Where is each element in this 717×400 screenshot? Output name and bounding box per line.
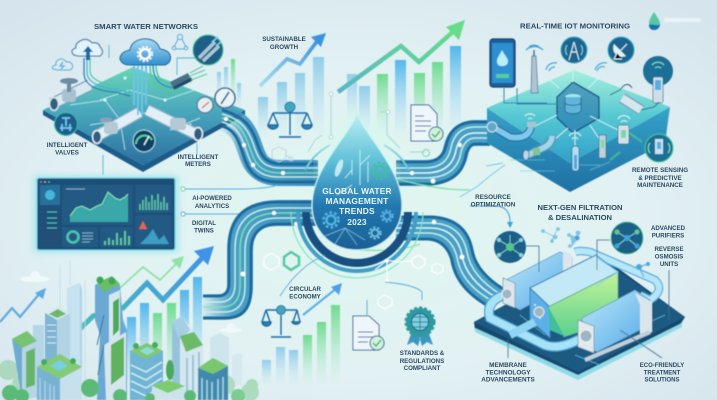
arrow head: small city growth xyxy=(35,288,46,299)
label: standards and regulations compliant: STANDARDS & xyxy=(400,350,445,357)
icon: scales bottom xyxy=(262,306,300,337)
heading: next-gen filtration and desalination: & DESALINATION xyxy=(548,213,612,222)
icon: gear left xyxy=(324,212,338,228)
icon: scales top xyxy=(268,102,312,137)
label: intelligent valves: VALVES xyxy=(55,150,79,156)
icon: cloud small left xyxy=(72,39,102,56)
building: right low xyxy=(198,358,228,400)
icon: white molecule hexagons xyxy=(264,253,443,309)
glow: dashboard xyxy=(33,175,179,253)
label: eco-friendly treatment solutions: TREATMENT xyxy=(644,370,681,376)
icon: lightning cloud outline xyxy=(52,59,73,70)
title: global water management trends 2023: GLOBAL WATER xyxy=(322,186,392,196)
tank: right cylinder xyxy=(578,290,652,360)
label: circular economy: CIRCULAR xyxy=(289,286,322,293)
building: central tower xyxy=(95,276,127,400)
building: green terrace left xyxy=(45,307,70,380)
arrow: city growth main xyxy=(72,256,204,337)
label: membrane technology advancements: TECHNOLOGY xyxy=(485,370,531,376)
tank: connecting pipe xyxy=(510,307,544,335)
icon: molecule small right xyxy=(636,262,650,277)
icon: phone xyxy=(490,39,515,87)
dashboard xyxy=(37,178,175,250)
pipe: iot elbow lower xyxy=(523,136,552,160)
icon: remote sensing circle xyxy=(645,134,673,162)
ring: lower arc around the droplet xyxy=(291,145,423,278)
label: reverse osmosis units: REVERSE xyxy=(654,246,684,253)
panel: top right bars xyxy=(135,185,172,213)
arrow: sustainable growth xyxy=(260,40,318,86)
lines: filtration callouts xyxy=(508,240,669,358)
icon: cloud centre xyxy=(120,39,170,65)
pipeline: lower left xyxy=(203,202,318,318)
tank: blue chamber xyxy=(530,255,618,338)
icon: floating molecules xyxy=(542,228,580,248)
icon: dashboard badge dot xyxy=(45,190,55,200)
label: circular economy: ECONOMY xyxy=(289,294,321,300)
label: standards and regulations compliant: REGULATIONS xyxy=(400,358,444,365)
label: sustainable growth: GROWTH xyxy=(270,44,299,51)
block: iot water xyxy=(487,70,670,192)
pipeline: upper right xyxy=(396,122,490,184)
arrow: small city growth xyxy=(0,293,40,322)
icon: wifi small left xyxy=(546,63,557,71)
icon: gauge centre xyxy=(133,130,155,152)
label: eco-friendly treatment solutions: ECO-FRIENDLY xyxy=(640,363,684,369)
icon: molecule grey upper xyxy=(272,147,293,162)
lines: centre circuit connectors xyxy=(308,92,430,156)
pipe: left main pipe with valve xyxy=(50,78,90,110)
cables: from clouds xyxy=(84,58,178,115)
label: advanced purifiers: ADVANCED xyxy=(651,225,686,232)
building: stripes centre xyxy=(130,342,163,400)
icon: molecule circle left xyxy=(494,231,526,263)
building: far left xyxy=(12,331,37,400)
label: remote sensing and predictive maintenance: & PREDICTIVE xyxy=(638,175,682,182)
icon: triangle nodes xyxy=(172,34,188,50)
icon: cylinder sensor xyxy=(610,84,659,110)
bar chart: lower centre xyxy=(262,305,340,385)
label: remote sensing and predictive maintenance: MAINTENANCE xyxy=(637,182,683,189)
title: global water management trends 2023: 2023 xyxy=(347,217,367,227)
label: advanced purifiers: PURIFIERS xyxy=(652,232,684,240)
label: eco-friendly treatment solutions: SOLUTIONS xyxy=(644,378,680,384)
building: mid left with pool xyxy=(37,354,82,400)
arrow: resource optimization xyxy=(470,206,510,222)
icon: server hexagon xyxy=(557,82,599,133)
pipe: lower right with meter xyxy=(147,110,202,140)
heading: smart water networks: SMART WATER NETWORKS xyxy=(94,22,198,31)
bar chart: small network bars xyxy=(217,59,241,109)
title: global water management trends 2023: MANAGEMENT xyxy=(326,196,389,206)
icon: molecule circle right xyxy=(611,222,643,254)
label: ai-powered analytics: ANALYTICS xyxy=(195,203,229,210)
heading: real-time iot monitoring: REAL-TIME IOT MONITORING xyxy=(520,22,630,30)
lines: lower curve connector xyxy=(280,255,422,315)
panel: leak alert xyxy=(135,215,172,247)
icon: wifi in water xyxy=(525,114,630,139)
panel: dashboard side menu xyxy=(40,206,60,247)
glow: around droplet xyxy=(321,118,393,202)
lines: label connectors xyxy=(103,45,275,216)
arrow head: upper centre growth xyxy=(446,20,465,40)
icon: gear right xyxy=(382,210,392,222)
platform: smart water networks xyxy=(43,67,245,172)
icon: wifi small right xyxy=(595,63,607,71)
label: ai-powered analytics: AI-POWERED xyxy=(192,195,232,202)
icon: upload arrow in cloud xyxy=(83,46,93,60)
label: intelligent meters: METERS xyxy=(185,161,211,168)
pipe: filtration loop xyxy=(489,295,578,347)
lines: thin green connectors xyxy=(360,175,470,250)
arrow head: sustainable growth xyxy=(311,33,326,47)
city buildings background xyxy=(33,260,242,400)
building: tall slanted xyxy=(172,316,203,400)
building: lower terrace xyxy=(152,360,185,400)
icon: valve circle xyxy=(54,112,78,136)
label: remote sensing and predictive maintenance: REMOTE SENSING xyxy=(632,167,688,174)
label: intelligent meters: INTELLIGENT xyxy=(178,154,218,161)
icon: compliance badge xyxy=(406,308,434,346)
platform: filtration base xyxy=(474,255,685,380)
pipeline: upper left xyxy=(222,110,318,182)
tank: green membrane xyxy=(548,257,618,337)
pipe: lower left with meter xyxy=(92,112,140,144)
panel: main consumption chart xyxy=(62,185,133,225)
label: membrane technology advancements: ADVANCEMENTS xyxy=(481,376,535,384)
bar chart: city growth xyxy=(127,277,202,387)
decor: clouds in city xyxy=(20,271,242,332)
heading: next-gen filtration and desalination: NEXT-GEN FILTRATION xyxy=(538,203,622,212)
label: standards and regulations compliant: COMPLIANT xyxy=(404,365,441,372)
panel: small bars xyxy=(100,227,133,247)
pipeline: lower right xyxy=(396,217,503,307)
arrow head: resource optimization xyxy=(507,222,513,228)
line: iot outflow xyxy=(460,163,505,197)
icon: gauges on platform xyxy=(197,88,235,113)
icon: sensors in water xyxy=(572,125,629,171)
icon: gear bottom xyxy=(370,228,380,238)
icon: molecule green xyxy=(284,252,299,270)
label: reverse osmosis units: OSMOSIS xyxy=(655,254,683,260)
icon: document check lower xyxy=(353,316,384,350)
label: sustainable growth: SUSTAINABLE xyxy=(262,36,306,43)
panel: donut xyxy=(62,227,98,247)
label: reverse osmosis units: UNITS xyxy=(660,261,678,268)
label: resource optimization: RESOURCE xyxy=(475,194,511,201)
icon: antenna circle xyxy=(561,37,587,63)
arrow: city growth green xyxy=(120,262,178,288)
pipe: filtration back loop xyxy=(575,251,659,300)
label: intelligent valves: INTELLIGENT xyxy=(47,142,87,149)
arrow head: lower centre xyxy=(331,283,342,295)
bar chart: upper centre growth xyxy=(359,46,461,141)
arrow: upper centre growth xyxy=(338,29,456,92)
icon: sensor circle xyxy=(643,56,673,103)
lines: iot connectors xyxy=(504,65,618,148)
arrow: lower centre xyxy=(303,288,337,315)
title: global water management trends 2023: TRENDS xyxy=(339,206,375,216)
icon: logo xyxy=(649,12,701,30)
bushes: background xyxy=(0,360,259,400)
arrow head: city growth main xyxy=(194,246,214,265)
tank: left cylinder xyxy=(502,250,572,310)
label: digital twins: TWINS xyxy=(194,228,214,234)
pipe: iot elbow upper xyxy=(487,122,536,138)
droplet xyxy=(312,113,402,250)
icon: satellite circle xyxy=(608,37,634,63)
panel: dashboard badge xyxy=(40,185,60,205)
icon: document check upper xyxy=(411,105,443,141)
label: digital twins: DIGITAL xyxy=(192,220,216,227)
icon: wifi tower post xyxy=(526,45,543,93)
bar chart: upper left growth xyxy=(258,57,357,137)
icon: fibre bundle xyxy=(172,66,207,88)
label: resource optimization: OPTIMIZATION xyxy=(471,202,516,208)
bushes: foreground xyxy=(2,379,258,400)
arrow head: city growth green xyxy=(171,256,184,269)
icon: gear top xyxy=(372,163,388,179)
icon: fibre cable circle xyxy=(193,35,223,65)
label: membrane technology advancements: MEMBRANE xyxy=(489,362,528,369)
